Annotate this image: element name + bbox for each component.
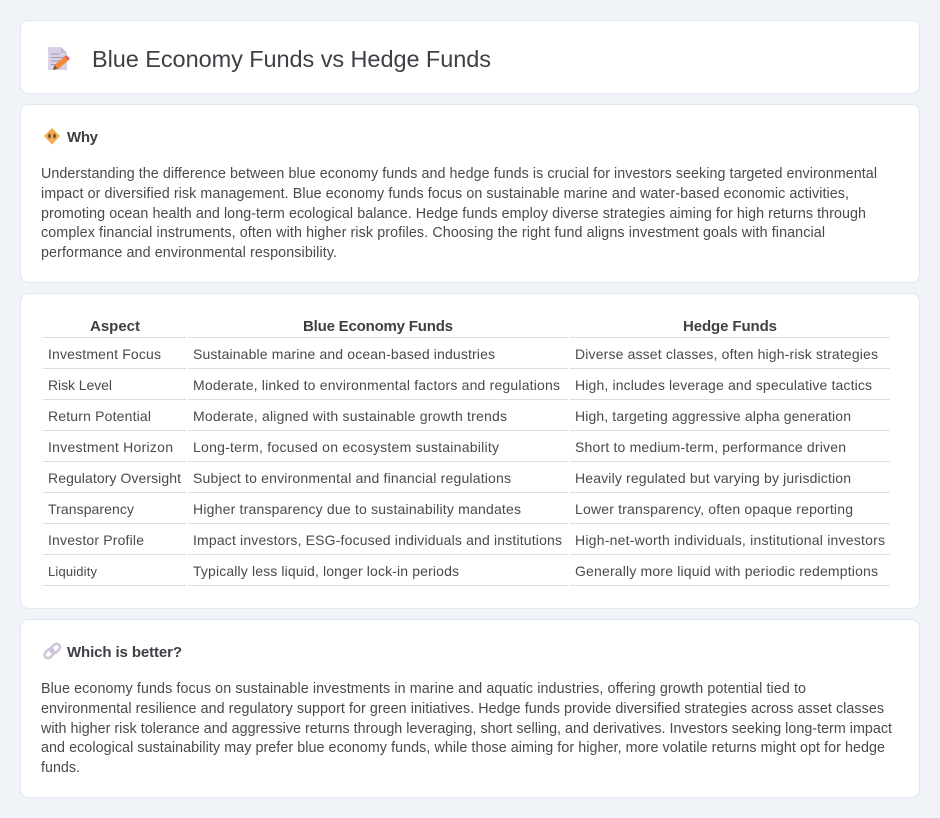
panel: comparison table (20, 294, 920, 608)
panel: which is better (20, 620, 920, 798)
row: regulatory oversight: Subject to environmental and financial regulations (193, 470, 511, 486)
text block: which is better: environmental resilience and regulatory support for green initiatives. Hedge funds provide diversified strategies across asset classes (41, 701, 884, 717)
row: risk level: Moderate, linked to environmental factors and regulations (193, 377, 560, 393)
icon: warning diamond (44, 128, 60, 144)
row: return potential: Moderate, aligned with sustainable growth trends (193, 408, 507, 424)
table row lines (43, 337, 890, 586)
row: liquidity: Typically less liquid, longer lock-in periods (193, 563, 459, 579)
row: transparency: Lower transparency, often opaque reporting (575, 501, 853, 517)
text block: why (41, 166, 877, 261)
row: investment focus: Sustainable marine and ocean-based industries (193, 346, 495, 362)
text block: why: Understanding the difference between blue economy funds and hedge funds is crucial for investors seeking targeted environmental (41, 166, 877, 182)
row: investment focus: Diverse asset classes, often high-risk strategies (575, 346, 878, 362)
row: investor profile (48, 532, 885, 548)
row: return potential: Return Potential (48, 408, 151, 424)
row: investment horizon: Investment Horizon (48, 439, 173, 455)
table header row: Hedge Funds (683, 318, 777, 335)
row: investment horizon: Short to medium-term, performance driven (575, 439, 846, 455)
panel: why (20, 104, 920, 282)
icon: chain link (43, 642, 61, 660)
row: liquidity: Generally more liquid with periodic redemptions (575, 563, 878, 579)
row: transparency: Transparency (48, 501, 134, 517)
heading: why: Why (67, 129, 99, 146)
text block: why: promoting ocean health and long-term ecological balance. Hedge funds employ diverse strategies aiming for high returns through (41, 206, 866, 222)
row: liquidity (48, 563, 878, 579)
row: regulatory oversight: Heavily regulated but varying by jurisdiction (575, 470, 851, 486)
row: investment horizon (48, 439, 846, 455)
row: liquidity: Liquidity (48, 564, 98, 579)
title: Blue Economy Funds vs Hedge Funds (92, 46, 491, 72)
table header row: Blue Economy Funds (303, 318, 453, 335)
text block: which is better: with higher risk tolerance and aggressive returns through leveraging, short selling, and derivatives. Investors seeking long-term impact (40, 721, 892, 737)
row: investor profile: Investor Profile (48, 532, 144, 548)
row: return potential: High, targeting aggressive alpha generation (575, 408, 851, 424)
row: risk level (48, 377, 872, 393)
row: risk level: Risk Level (48, 377, 112, 393)
row: investment focus (48, 346, 878, 362)
text block: which is better: and ecological sustainability may prefer blue economy funds, while those aiming for higher, more volatile returns might opt for hedge (41, 740, 885, 756)
icon: document with pencil (48, 47, 70, 70)
row: regulatory oversight: Regulatory Oversight (48, 470, 181, 486)
row: investor profile: Impact investors, ESG-focused individuals and institutions (193, 532, 562, 548)
table header row: Aspect (90, 318, 140, 335)
row: return potential (48, 408, 851, 424)
text block: which is better: funds. (41, 760, 80, 776)
text block: which is better (40, 681, 892, 776)
row: risk level: High, includes leverage and speculative tactics (575, 377, 872, 393)
row: regulatory oversight (48, 470, 851, 486)
text block: why: impact or diversified risk management. Blue economy funds focus on sustainable marine and water-based economic activities, (41, 186, 849, 202)
heading: which is better: Which is better? (67, 644, 182, 661)
row: transparency: Higher transparency due to sustainability mandates (193, 501, 521, 517)
panel: title header (20, 20, 920, 94)
row: investment horizon: Long-term, focused on ecosystem sustainability (193, 439, 499, 455)
text block: which is better: Blue economy funds focus on sustainable investments in marine and aquatic industries, offering growth potential tied to (41, 681, 806, 697)
table header row (90, 318, 777, 335)
row: transparency (48, 501, 853, 517)
row: investor profile: High-net-worth individuals, institutional investors (575, 532, 885, 548)
row: investment focus: Investment Focus (48, 346, 161, 362)
text block: why: performance and environmental responsibility. (41, 245, 337, 261)
text block: why: complex financial instruments, often with higher risk profiles. Choosing the right fund aligns investment goals with financial (41, 225, 825, 241)
